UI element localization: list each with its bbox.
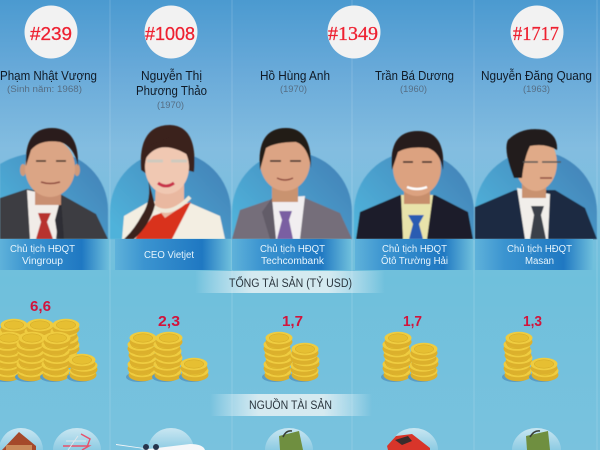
rank badge: #1008 (144, 6, 198, 58)
icon: shopping cart (53, 428, 101, 450)
portrait: Nguyễn Thị Phương Thảo (110, 125, 231, 239)
rank badge: #1349: #1349 (328, 23, 378, 45)
name: Nguyễn Đăng Quang: Nguyễn Đăng Quang (481, 68, 592, 83)
role banner: Vingroup: Vingroup (22, 256, 63, 267)
coins: 1,3: 1,3 (523, 314, 542, 330)
name: Nguyễn Thị Phương Thảo (136, 68, 207, 111)
icon: airplane (116, 428, 205, 450)
name: Nguyễn Đăng Quang: (1963) (523, 84, 550, 95)
coins: 6,6: 6,6 (30, 299, 51, 315)
portrait: Phạm Nhật Vượng (0, 128, 108, 239)
name: Nguyễn Đăng Quang (481, 68, 592, 95)
name: Phạm Nhật Vượng: (Sinh năm: 1968) (7, 84, 82, 95)
name: Nguyễn Thị Phương Thảo: (1970) (157, 100, 184, 111)
role banner: Ôtô Trường Hải: Chủ tịch HĐQT (382, 243, 447, 255)
rank badge: #1349 (328, 6, 380, 58)
role banner: Vietjet: CEO Vietjet (144, 250, 194, 261)
coins: 6,6 (0, 299, 98, 382)
role banner: Masan: Masan (525, 256, 554, 267)
role banner: Masan (475, 239, 593, 270)
coins: 1,7 Techcombank (262, 314, 320, 382)
name: Hồ Hùng Anh: (1970) (280, 84, 307, 95)
section heading: total assets: TỔNG TÀI SẢN (TỶ USD) (229, 277, 352, 290)
name: Trần Bá Dương: Trần Bá Dương (375, 68, 454, 83)
role banner: Ôtô Trường Hải: Ôtô Trường Hải (381, 254, 448, 267)
coins: 1,7 Trường Hải (381, 314, 438, 382)
portrait: Nguyễn Đăng Quang (475, 129, 597, 239)
coins: 2,3 (126, 314, 208, 382)
name: Nguyễn Thị Phương Thảo: Nguyễn Thị (141, 68, 202, 83)
section heading: asset sources (210, 394, 372, 416)
icon: red car (387, 428, 438, 450)
coins: 1,7 Techcombank: 1,7 (282, 314, 303, 330)
icon: shopping bag (265, 428, 313, 450)
role banner: Vingroup (0, 239, 109, 270)
section heading: total assets (195, 271, 385, 293)
name: Nguyễn Thị Phương Thảo: Phương Thảo (136, 83, 207, 98)
role banner: Vietjet (115, 239, 231, 270)
rank badge: #1717: #1717 (513, 23, 559, 45)
rank badge: #1717 (510, 6, 564, 58)
name: Hồ Hùng Anh: Hồ Hùng Anh (260, 68, 330, 83)
rank badge: #239 (24, 6, 78, 58)
role banner: Techcombank: Chủ tịch HĐQT (260, 243, 325, 255)
icon: shopping bag (512, 428, 561, 450)
coins: 1,7 Trường Hải: 1,7 (403, 314, 422, 330)
role banner: Masan: Chủ tịch HĐQT (507, 243, 572, 255)
role banner: Ôtô Trường Hải (355, 239, 473, 270)
name: Trần Bá Dương (375, 68, 454, 95)
rank badge: #239: #239 (30, 24, 72, 44)
name: Trần Bá Dương: (1960) (400, 84, 427, 95)
portrait: Hồ Hùng Anh (232, 128, 352, 239)
section heading: asset sources: NGUỒN TÀI SẢN (249, 399, 332, 412)
icon: house (0, 428, 43, 450)
name: Phạm Nhật Vượng (0, 68, 97, 95)
name: Phạm Nhật Vượng: Phạm Nhật Vượng (0, 68, 97, 83)
rank badge: #1008: #1008 (145, 24, 195, 44)
role banner: Techcombank: Techcombank (261, 256, 325, 267)
role banner: Techcombank (232, 239, 351, 270)
coins: 1,3 (502, 314, 558, 382)
coins: 2,3: 2,3 (158, 314, 180, 330)
name: Hồ Hùng Anh (260, 68, 330, 95)
role banner: Vingroup: Chủ tịch HĐQT (10, 243, 75, 255)
portrait: Trần Bá Dương (354, 131, 474, 239)
